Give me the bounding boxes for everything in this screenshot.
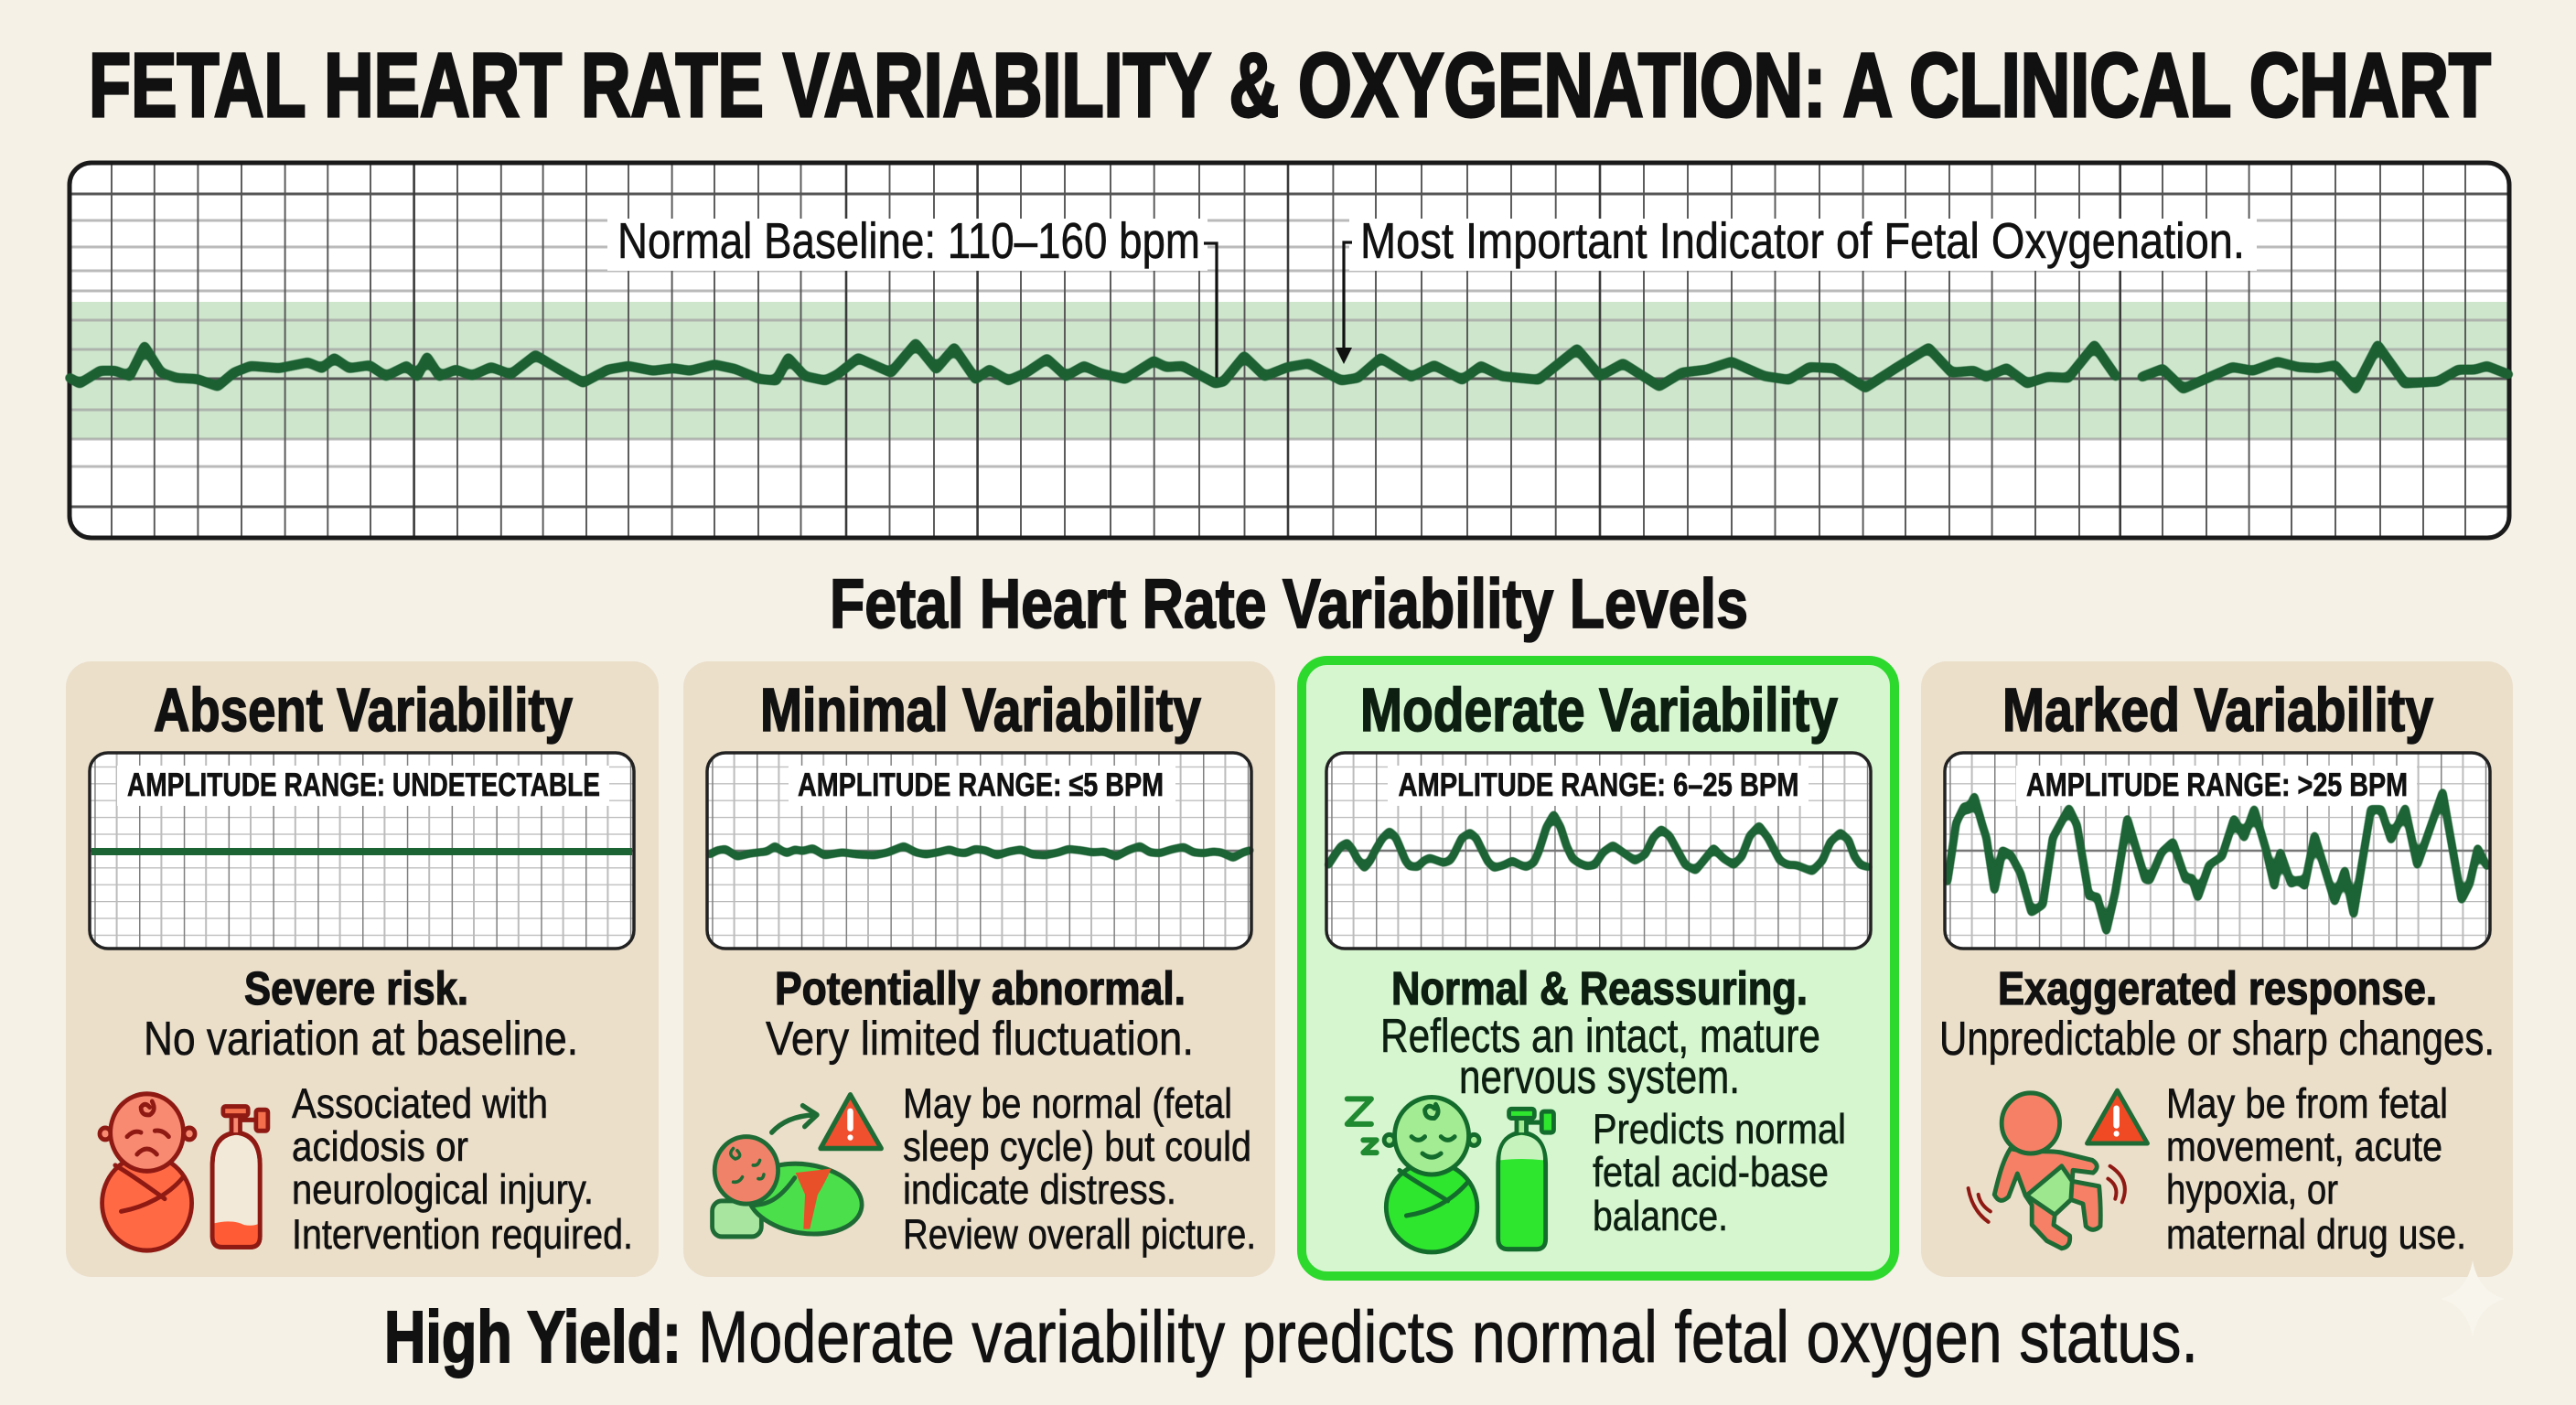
normal baseline green band [70,302,2509,439]
description [292,1079,633,1258]
chart: flat trace: AMPLITUDE RANGE: UNDETECTABLE [127,766,600,803]
status text: Very limited fluctuation. [766,1013,1194,1066]
description: sleep cycle) but could [903,1122,1251,1170]
status text [144,962,578,1066]
description: fetal acid-base [1593,1148,1829,1196]
status text: Potentially abnormal. [775,962,1186,1014]
status text [1939,962,2495,1066]
fetal heart rate trace [70,344,2508,389]
callout: most important indicator: Most Important Indicator of Fetal Oxygenation. [1360,212,2245,269]
panel: marked variability [1921,661,2513,1277]
chart: small fluctuations [707,753,1251,949]
status text [766,962,1194,1066]
heading: Minimal Variability [760,676,1201,745]
high yield footer: Moderate variability predicts normal fetal oxygen status. [698,1296,2198,1378]
panel: absent variability [66,661,659,1277]
status text: Exaggerated response. [1998,962,2437,1014]
sparkle watermark [2441,1260,2505,1337]
high yield footer: High Yield: [384,1296,682,1378]
status text: Reflects an intact, mature [1380,1010,1820,1063]
panel: minimal variability [683,661,1275,1277]
chart: flat trace [90,753,634,949]
status text: Normal & Reassuring. [1391,962,1808,1014]
chart: moderate fluctuations: AMPLITUDE RANGE: 6–25 BPM [1398,766,1798,803]
description: Review overall picture. [903,1210,1256,1258]
description: Predicts normal [1593,1105,1846,1153]
icon: moving baby with warning triangle [1969,1090,2148,1249]
description: May be from fetal [2166,1079,2448,1127]
chart: large fluctuations: AMPLITUDE RANGE: >25 BPM [2026,766,2408,803]
description: balance. [1593,1192,1728,1239]
icon: sleeping baby with warning triangle [713,1095,881,1241]
section heading: Fetal Heart Rate Variability Levels [830,565,1748,643]
description [903,1079,1256,1258]
panel: main fetal heart rate strip chart [70,163,2509,538]
heading: Moderate Variability [1360,676,1838,745]
description [2166,1079,2466,1258]
chart: small fluctuations: AMPLITUDE RANGE: ≤5 BPM [798,766,1164,803]
description: hypoxia, or [2166,1165,2338,1213]
description: neurological injury. [292,1165,594,1213]
heading: Marked Variability [2002,676,2433,745]
heading: Absent Variability [154,676,573,745]
description: indicate distress. [903,1165,1176,1213]
description: movement, acute [2166,1122,2442,1170]
status text: nervous system. [1459,1051,1740,1104]
icon: sad baby and low oxygen tank [100,1094,268,1250]
description: Associated with [292,1079,548,1127]
description [1593,1105,1846,1239]
chart: moderate fluctuations [1326,753,1871,949]
callout: most important indicator [1336,212,2257,364]
callout: normal baseline [607,212,1217,383]
status text: No variation at baseline. [144,1013,578,1066]
description: maternal drug use. [2166,1210,2466,1258]
callout: normal baseline: Normal Baseline: 110–160 bpm [617,212,1200,269]
panel: moderate variability (highlighted) [1302,660,1894,1276]
description: acidosis or [292,1122,468,1170]
chart: large fluctuations [1945,753,2490,949]
status text: Severe risk. [244,962,468,1014]
description: May be normal (fetal [903,1079,1232,1127]
status text [1380,962,1820,1104]
icon: sleeping baby and full oxygen tank [1347,1098,1553,1252]
description: Intervention required. [292,1210,633,1258]
